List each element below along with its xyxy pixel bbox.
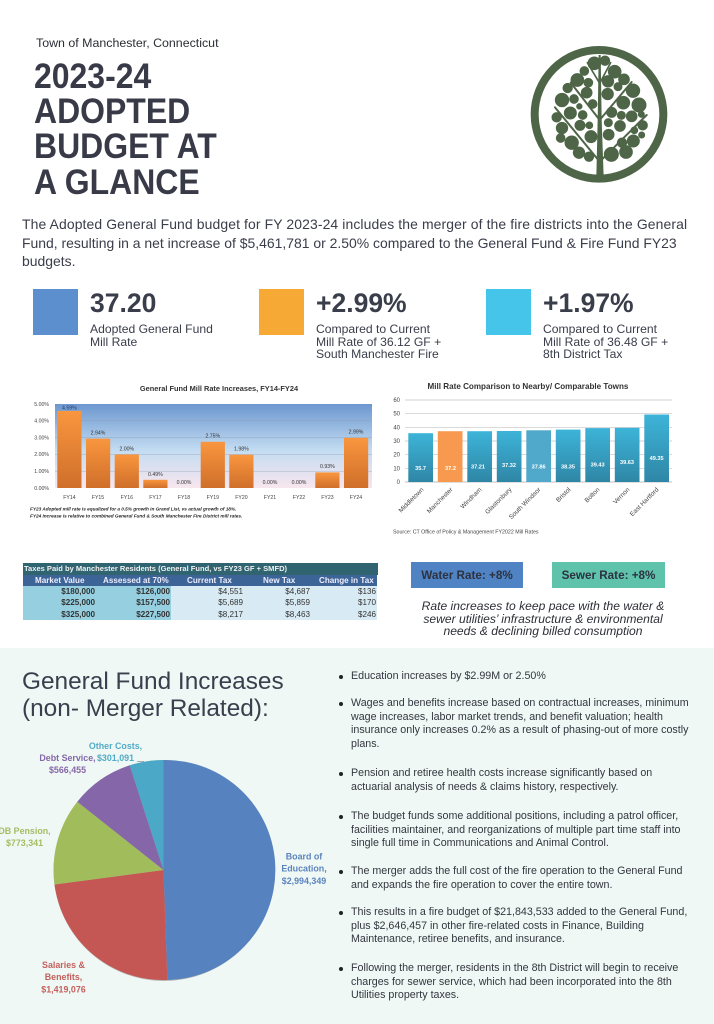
bullet: sewer charges (339, 962, 678, 1001)
bullet: fire budget: plus $2,646,457 in other fire-related costs in Finance, Building (351, 920, 644, 932)
table rows: $5,859 (285, 598, 310, 607)
table rows: $8,217 (218, 610, 243, 619)
bar chart: general fund mill rate increases: 1.98% (234, 446, 249, 452)
bar chart: mill rate comparison to nearby towns: Vernon (612, 486, 632, 506)
bullet: education: Education increases by $2.99M or 2.50% (351, 670, 546, 682)
bar chart: mill rate comparison to nearby towns: 37.86 (532, 464, 546, 470)
bullet: fire budget (339, 906, 687, 945)
bar chart: mill rate comparison to nearby towns: 38.35 (561, 464, 575, 470)
icon: town tree logo (530, 46, 668, 183)
bar chart: general fund mill rate increases (30, 384, 372, 518)
label: board of education: Education, (281, 864, 327, 874)
label: db pension: $773,341 (6, 838, 43, 848)
bullet: pension: actuarial analysis of needs & claims history, respectively. (351, 781, 618, 793)
title: A GLANCE (34, 162, 200, 202)
bar chart: general fund mill rate increases: FY18 (178, 495, 190, 501)
bar chart: mill rate comparison to nearby towns: 30 (393, 439, 401, 445)
bar chart: mill rate comparison to nearby towns: South Windsor (508, 486, 543, 521)
icon: orange square (259, 289, 304, 335)
table rows: $180,000 (61, 587, 95, 596)
panel heading: (non- Merger Related): (22, 694, 269, 722)
bar chart: mill rate comparison to nearby towns: 39.43 (591, 462, 605, 468)
stat value: +1.97% (543, 288, 634, 318)
bullet: additional positions: single full time in Communications and Animal Control. (351, 837, 609, 849)
bullet: additional positions (339, 810, 681, 849)
bar chart: mill rate comparison to nearby towns: Windham (459, 486, 483, 511)
bullet: merger (339, 865, 683, 891)
badge: sewer rate: Sewer Rate: +8% (562, 569, 655, 582)
label: board of education: $2,994,349 (282, 876, 326, 886)
bar chart: mill rate comparison to nearby towns: East Hartford (629, 486, 661, 518)
table header (23, 574, 377, 586)
stat caption: South Manchester Fire (316, 347, 439, 361)
label: salaries and benefits: $1,419,076 (41, 984, 86, 994)
bar chart: general fund mill rate increases: General Fund Mill Rate Increases, FY14-FY24 (140, 384, 299, 393)
bar chart: general fund mill rate increases: 5.00% (34, 402, 49, 408)
bar chart: mill rate comparison to nearby towns: 37.2 (445, 466, 456, 472)
table rows: $5,689 (218, 598, 243, 607)
table header: Market Value (35, 576, 84, 584)
pie chart: increases by category (0, 741, 327, 994)
table rows: $246 (358, 610, 376, 619)
panel: general fund increases (0, 648, 714, 1024)
bullet: sewer charges: charges for sewer service, which had been incorporated into the 8th (351, 976, 672, 988)
title: ADOPTED (34, 91, 190, 131)
bar chart: general fund mill rate increases: 0.00% (34, 486, 49, 492)
stat caption (316, 322, 441, 361)
stat caption: Mill Rate (90, 334, 137, 348)
bar chart: mill rate comparison to nearby towns: Manchester (426, 486, 455, 515)
bullet: wages and benefits: wage increases, labor market trends, and benefit valuation; health (351, 711, 663, 723)
stat value: 37.20 (90, 288, 156, 318)
table: taxes paid by manchester residents (23, 563, 377, 620)
stat caption: Compared to Current (316, 322, 430, 336)
bar chart: mill rate comparison to nearby towns: Bristol (555, 486, 572, 504)
bar chart: mill rate comparison to nearby towns: 49.35 (650, 456, 664, 462)
stat value: +2.99% (316, 288, 407, 318)
rate note: sewer utilities’ infrastructure & environmental (423, 612, 663, 626)
bar chart: mill rate comparison to nearby towns: 37.32 (502, 463, 516, 469)
table rows: $227,500 (136, 610, 170, 619)
label: board of education: Board of (286, 852, 322, 862)
bar chart: general fund mill rate increases: 2.00% (119, 446, 135, 452)
label: salaries and benefits: Benefits, (45, 972, 82, 982)
table title: Taxes Paid by Manchester Residents (General Fund, vs FY23 GF + SMFD) (24, 564, 287, 573)
stat caption: Mill Rate of 36.12 GF + (316, 334, 441, 348)
title: 2023-24 (34, 56, 151, 96)
header: town name: Town of Manchester, Connecticut (36, 36, 219, 50)
bar chart: general fund mill rate increases: 1.00% (34, 469, 49, 475)
bar chart: mill rate comparison to nearby towns: Bolton (584, 486, 602, 504)
table rows: $225,000 (61, 598, 95, 607)
bar chart: general fund mill rate increases: 0.00% (263, 480, 278, 486)
bar chart: general fund mill rate increases: 0.93% (320, 464, 335, 470)
bar chart: general fund mill rate increases: 0.49% (148, 472, 163, 478)
bullet: wages and benefits: plans. (351, 738, 380, 750)
bar chart: mill rate comparison to nearby towns: 60 (393, 398, 401, 404)
stat caption: Compared to Current (543, 322, 657, 336)
table rows (23, 586, 376, 620)
table rows: $8,463 (285, 610, 310, 619)
intro text: budgets. (22, 253, 75, 269)
icon: cyan square (486, 289, 531, 335)
label: other costs: Other Costs, (89, 741, 142, 751)
bar chart: general fund mill rate increases: FY17 (149, 495, 162, 501)
table rows: $157,500 (136, 598, 170, 607)
bar chart: mill rate comparison to nearby towns: 40 (393, 425, 401, 431)
bar chart: general fund mill rate increases: FY24 (350, 495, 362, 501)
bar chart: general fund mill rate increases: FY20 (235, 495, 248, 501)
bar chart: mill rate comparison to nearby towns: 35.7 (415, 466, 426, 472)
bar chart: general fund mill rate increases: FY23 (321, 495, 334, 501)
bar chart: mill rate comparison to nearby towns: 0 (397, 480, 401, 486)
badge: water rate: Water Rate: +8% (421, 569, 513, 582)
rate note: needs & declining billed consumption (443, 624, 642, 638)
bar chart: general fund mill rate increases: FY22 (293, 495, 305, 501)
bar chart: general fund mill rate increases: 0.00% (292, 480, 307, 486)
bullet: wages and benefits (339, 697, 689, 750)
panel heading: General Fund Increases (22, 668, 284, 695)
badge: water rate (411, 562, 523, 588)
bar chart: general fund mill rate increases: FY16 (121, 495, 133, 501)
rate note: Rate increases to keep pace with the water & (422, 599, 664, 613)
label: salaries and benefits: Salaries & (42, 960, 86, 970)
icon: blue square (33, 289, 78, 335)
bullet: sewer charges: Utilities property taxes. (351, 989, 459, 1001)
table rows: $170 (358, 598, 376, 607)
bullet: wages and benefits: insurance only increases 0.2% as a result of phasing-out of more costly (351, 724, 688, 736)
panel heading (22, 668, 284, 722)
bullet: additional positions: The budget funds some additional positions, including a patrol officer, (351, 810, 678, 822)
bar chart: general fund mill rate increases: FY15 (92, 495, 104, 501)
rate note (422, 599, 664, 638)
bar chart: mill rate comparison to nearby towns: Source: CT Office of Policy & Management FY2022 Mill Rates (393, 530, 539, 536)
bar chart: mill rate comparison to nearby towns: 50 (393, 412, 401, 418)
bar chart: general fund mill rate increases: 2.00% (34, 452, 49, 458)
bar chart: general fund mill rate increases: FY21 (264, 495, 276, 501)
bar chart: mill rate comparison to nearby towns: Glastonbury (484, 486, 514, 516)
stat: compared to south manchester (259, 288, 441, 361)
bar chart: mill rate comparison to nearby towns: Middletown (398, 486, 426, 514)
table header: Assessed at 70% (103, 576, 169, 584)
bar chart: general fund mill rate increases: FY24 increase is relative to combined General Fund & South Manchester Fire District mill rates. (30, 514, 242, 518)
table rows: $325,000 (61, 610, 95, 619)
table header: Current Tax (187, 576, 232, 584)
table rows: $136 (358, 587, 376, 596)
bullet: wages and benefits: Wages and benefits increase based on contractual increases, minimum (351, 697, 689, 709)
bar chart: general fund mill rate increases: FY14 (63, 495, 76, 501)
bar chart: general fund mill rate increases: 2.75% (205, 434, 221, 440)
stat: compared to 8th district (486, 288, 668, 361)
intro text (22, 216, 687, 269)
bar chart: general fund mill rate increases: 4.59% (62, 406, 77, 412)
bar chart: general fund mill rate increases: 3.00% (34, 436, 49, 442)
title: BUDGET AT (34, 126, 217, 166)
bar chart: general fund mill rate increases: FY19 (207, 495, 219, 501)
intro text: Fund, resulting in a net increase of $5,461,781 or 2.50% compared to the General Fund & Fire Fund FY23 (22, 235, 677, 251)
bar chart: mill rate comparison to nearby towns: 39.63 (620, 460, 634, 466)
label: debt service: Debt Service, (39, 753, 96, 763)
bar chart: general fund mill rate increases: 0.00% (177, 480, 192, 486)
bar chart: mill rate comparison to nearby towns: Mill Rate Comparison to Nearby/ Comparable Towns (428, 382, 629, 391)
bullet: pension: Pension and retiree health costs increase significantly based on (351, 767, 652, 779)
stat caption: Adopted General Fund (90, 322, 213, 336)
table title (23, 563, 378, 574)
table rows: $4,551 (218, 587, 243, 596)
stat caption: 8th District Tax (543, 347, 622, 361)
table header: New Tax (263, 576, 295, 584)
bar chart: mill rate comparison to nearby towns (393, 382, 672, 536)
stat caption (90, 322, 213, 348)
bar chart: mill rate comparison to nearby towns: 20 (393, 453, 401, 459)
bullet: sewer charges: Following the merger, residents in the 8th District will begin to receive (351, 962, 678, 974)
label: other costs: $301,091 (97, 753, 134, 763)
bullet: fire budget: This results in a fire budget of $21,843,533 added to the General Fund, (351, 906, 687, 918)
title (34, 56, 217, 202)
bar chart: general fund mill rate increases: 2.94% (91, 430, 106, 436)
table header: Change in Tax (319, 576, 374, 584)
bar chart: general fund mill rate increases: FY23 Adopted mill rate is equalized for a 0.5% growth in Grand List, vs actual growth of 18%. (30, 506, 236, 512)
bar chart: general fund mill rate increases: 4.00% (34, 418, 49, 424)
bar chart: mill rate comparison to nearby towns: 37.21 (471, 464, 485, 470)
bullet: merger: and expands the fire operation to cover the entire town. (351, 879, 612, 891)
stat caption: Mill Rate of 36.48 GF + (543, 334, 668, 348)
table rows: $4,687 (285, 587, 310, 596)
intro text: The Adopted General Fund budget for FY 2023-24 includes the merger of the fire districts into the General (22, 216, 687, 232)
bullet: fire budget: Maintenance, retiree benefits, and insurance. (351, 933, 565, 945)
stat caption (543, 322, 668, 361)
bar chart: mill rate comparison to nearby towns: 10 (393, 466, 401, 472)
bullet: merger: The merger adds the full cost of the fire operation to the General Fund (351, 865, 683, 877)
bullet: additional positions: facilities maintainer, and reorganizations of multiple part time staff into (351, 824, 681, 836)
bullet: pension (339, 767, 652, 793)
badge: sewer rate (552, 562, 665, 588)
label: debt service: $566,455 (49, 765, 86, 775)
bar chart: general fund mill rate increases: 2.99% (349, 430, 364, 436)
stat: mill rate (33, 288, 213, 348)
table rows: $126,000 (136, 587, 170, 596)
